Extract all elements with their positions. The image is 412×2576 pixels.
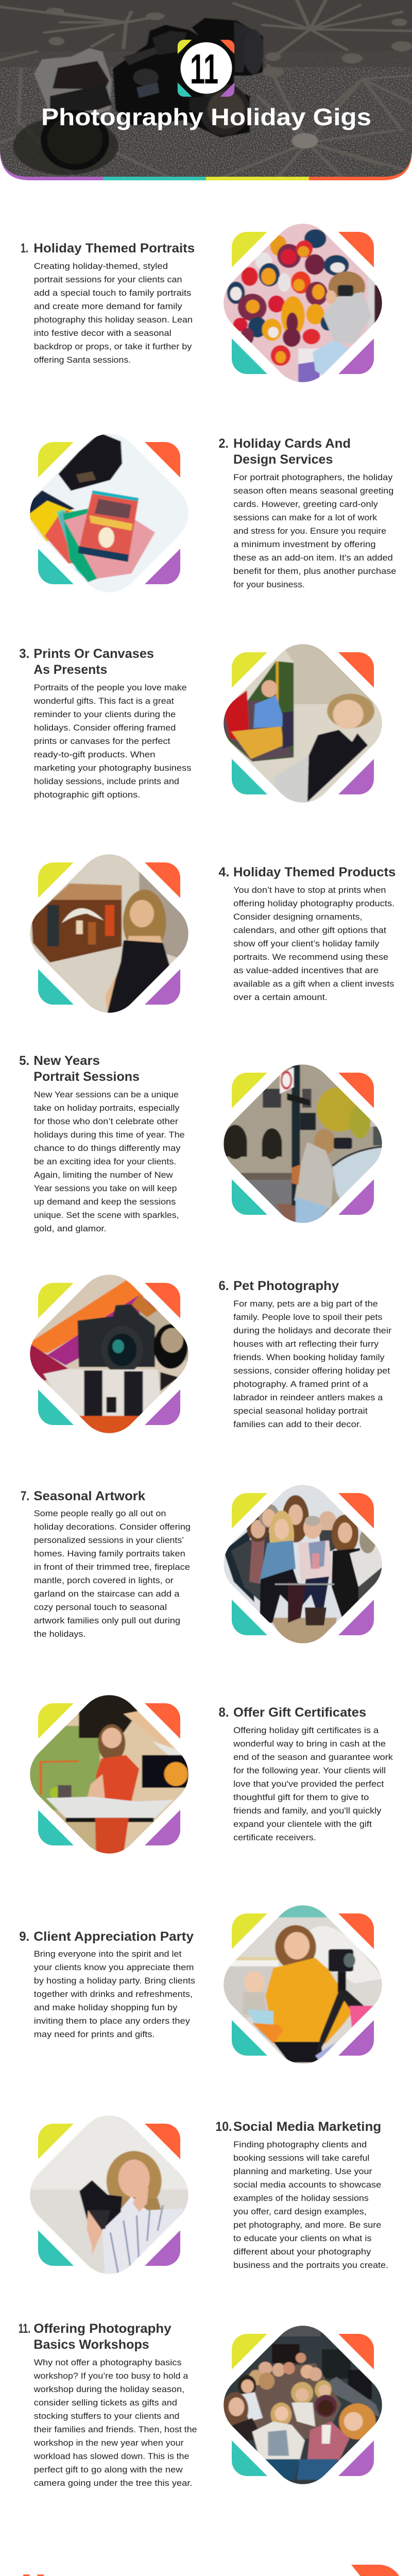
heading 5: New Years [33, 1054, 100, 1068]
body 8: thoughtful gift for them to give to [233, 1792, 369, 1802]
body 1 [34, 261, 193, 365]
section 2: Holiday Cards And Design Services [24, 429, 396, 601]
section 5 text [19, 1054, 185, 1233]
body 3: holiday sessions, include prints and [34, 776, 179, 786]
body 7: holiday decorations. Consider offering [34, 1522, 191, 1532]
body 4: available as a gift when a client invests [233, 979, 394, 989]
image 10: thoughtful woman holding a camera [30, 2115, 188, 2274]
heading 6: Pet Photography [233, 1279, 339, 1293]
body 2: these as an add-on item. It's an added [233, 553, 393, 563]
white circle [180, 42, 232, 94]
body 8: end of the season and guarantee work [233, 1752, 393, 1762]
heading 2 [218, 436, 351, 467]
body 10: social media accounts to showcase [233, 2180, 381, 2190]
body 10: Finding photography clients and [233, 2140, 367, 2149]
body 7: in front of their trimmed tree, fireplace [34, 1562, 190, 1572]
heading 3: As Presents [33, 663, 107, 677]
body 9: your clients know you appreciate them [34, 1962, 194, 1972]
body 5 [34, 1090, 185, 1233]
image 2: camera and printed cards [30, 434, 188, 592]
body 4: show off your client’s holiday family [233, 939, 380, 948]
section 10 text [215, 2120, 388, 2270]
heading 3: Prints Or Canvases [33, 647, 154, 661]
body 8: wonderful way to bring in cash at the [233, 1739, 386, 1749]
body 4: offering holiday photography products. [233, 899, 394, 908]
body 3 [33, 683, 191, 800]
body 11: workshop? If you’re too busy to hold a [33, 2371, 188, 2381]
body 1: photography this holiday season. Lean [34, 315, 193, 325]
body 11: consider selling tickets as gifts and [34, 2398, 177, 2408]
section 1: Holiday Themed Portraits [21, 224, 382, 382]
body 3: marketing your photography business [34, 763, 191, 773]
body 2: a minimum investment by offering [233, 539, 376, 549]
section 10: Social Media Marketing [24, 2112, 388, 2281]
badge with number 11 [178, 40, 234, 97]
body 2: For portrait photographers, the holiday [233, 472, 393, 482]
body 4: over a certain amount. [233, 992, 328, 1002]
body 3: Portraits of the people you love make [34, 683, 187, 692]
body 9: Bring everyone into the spirit and let [34, 1949, 182, 1959]
body 11 [33, 2358, 197, 2488]
body 2: sessions can make for a lot of work [233, 513, 377, 522]
heading 1: 1. [21, 241, 28, 256]
body 10: to educate your clients on what is [233, 2233, 372, 2243]
number 11: 11 [190, 46, 218, 93]
heading 3: 3. [19, 647, 29, 661]
body 1: and create more demand for family [34, 301, 182, 311]
body 6 [233, 1299, 392, 1429]
section 4: Holiday Themed Products [30, 854, 396, 1013]
orange corner accent [351, 2565, 403, 2576]
body 8 [233, 1725, 393, 1842]
heading 3 [19, 647, 154, 677]
body 3: holidays. Consider offering framed [34, 723, 176, 733]
body 6: during the holidays and decorate their [233, 1326, 392, 1335]
body 4: portraits. We recommend using these [233, 952, 388, 962]
heading 2: Design Services [233, 452, 333, 467]
body 10: booking sessions will take careful [233, 2153, 369, 2163]
body 8: certificate receivers. [233, 1833, 316, 1842]
image 8: woman in red dress at a desk [30, 1695, 188, 1854]
body 9: inviting them to place any orders they [34, 2016, 190, 2026]
section 8: Offer Gift Certificates [24, 1691, 393, 1860]
heading 9: Client Appreciation Party [33, 1929, 194, 1944]
heading 8: Offer Gift Certificates [233, 1705, 366, 1720]
body 7: cozy personal touch to seasonal [34, 1602, 167, 1612]
body 11: stocking stuffers to your clients and [34, 2411, 180, 2421]
body 5: up demand and keep the sessions [34, 1197, 176, 1207]
body 9: together with drinks and refreshments, [34, 1989, 193, 1999]
heading 4: 4. [218, 865, 230, 879]
body 3: prints or canvases for the perfect [34, 736, 170, 746]
section 2 text [218, 436, 396, 589]
body 8: expand your clientele with the gift [233, 1819, 372, 1829]
body 7: homes. Having family portraits taken [34, 1549, 185, 1558]
body 4: as value-added incentives that are [233, 965, 379, 975]
body 10: planning and marketing. Use your [233, 2166, 372, 2176]
body 1: add a special touch to family portraits [34, 288, 191, 298]
body 5: Year sessions you take on will keep [34, 1183, 177, 1193]
body 3: photographic gift options. [34, 790, 140, 800]
body 2: season often means seasonal greeting [233, 486, 393, 496]
section 1 text [21, 241, 195, 365]
body 5: Again, limiting the number of New [34, 1170, 173, 1180]
body 11: camera going under the tree this year. [34, 2478, 193, 2488]
heading 6: 6. [218, 1279, 229, 1293]
body 6: friends. When booking holiday family [233, 1352, 385, 1362]
heading 7: 7. [21, 1489, 29, 1503]
body 7: the holidays. [34, 1629, 85, 1639]
body 3: ready-to-gift products. When [34, 750, 156, 759]
section 6 text [218, 1279, 392, 1429]
section 5: New Years Portrait Sessions [19, 1054, 394, 1233]
body 6: houses with art reflecting their furry [233, 1339, 379, 1349]
body 5: gold, and glamor. [34, 1224, 107, 1233]
body 6: family. People love to spoil their pets [233, 1312, 382, 1322]
image 1: mural and photographer [224, 224, 382, 382]
section 9: Client Appreciation Party [19, 1903, 389, 2071]
heading 5 [19, 1054, 140, 1084]
section 7: Seasonal Artwork [21, 1484, 383, 1645]
Photography Business Institute logo [23, 2574, 123, 2576]
body 4 [233, 885, 394, 1002]
body 11: workshop in the new year when your [33, 2438, 184, 2448]
image 6: Canon camera and lenses on a striped rug [30, 1275, 188, 1433]
body 1: into festive decor with a seasonal [34, 328, 171, 338]
section 8 text [218, 1705, 393, 1842]
section 7 text [21, 1489, 191, 1639]
logo mark [23, 2574, 44, 2576]
section 9 text [19, 1929, 195, 2039]
body 2: for your business. [233, 580, 305, 589]
body 2: benefit for them, plus another purchase [233, 566, 396, 576]
body 6: For many, pets are a big part of the [233, 1299, 378, 1309]
body 6: sessions, consider offering holiday pet [233, 1366, 390, 1376]
heading 2: 2. [218, 436, 229, 451]
image 11: workshop group on a bus [224, 2326, 382, 2484]
body 10: pet photography, and more. Be sure [233, 2220, 381, 2230]
body 5: be an exciting idea for your clients. [34, 1157, 176, 1166]
body 6: photography. A framed print of a [233, 1379, 368, 1389]
image 5: photographer on a city street [224, 1064, 382, 1223]
body 3: reminder to your clients during the [34, 709, 176, 719]
section 3: Prints Or Canvases As Presents [19, 640, 389, 812]
body 5: New Year sessions can be a unique [34, 1090, 179, 1099]
body 1: backdrop or props, or take it further by [34, 342, 192, 351]
body 8: Offering holiday gift certificates is a [233, 1725, 379, 1735]
body 1: portrait sessions for your clients can [34, 275, 182, 284]
body 2 [233, 472, 396, 589]
section 3 text [19, 647, 191, 800]
body 10 [233, 2140, 388, 2270]
section 4 text [218, 865, 396, 1002]
left tele lens [34, 48, 112, 117]
heading 5: 5. [19, 1054, 29, 1068]
section 6: Pet Photography [24, 1271, 392, 1436]
body 7: artwork families only pull out during [34, 1616, 180, 1625]
body 9: may need for prints and gifts. [34, 2029, 154, 2039]
body 11: Why not offer a photography basics [34, 2358, 182, 2367]
heading 10: Social Media Marketing [233, 2120, 381, 2134]
body 5: chance to do things differently may [34, 1143, 181, 1153]
body 6: special seasonal holiday portrait [233, 1406, 368, 1416]
body 9 [34, 1949, 195, 2039]
body 7: Some people really go all out on [34, 1509, 166, 1518]
body 6: labrador in reindeer antlers makes a [233, 1393, 383, 1402]
body 5: unique. Set the scene with sparkles, [34, 1210, 179, 1220]
image 9: woman in yellow with camera on tripod [224, 1905, 382, 2064]
body 10: different about your photography [233, 2247, 371, 2257]
body 4: calendars, and other gift options that [233, 925, 386, 935]
body 11: perfect gift to go along with the new [34, 2465, 183, 2475]
image 7: team group portrait [224, 1484, 383, 1645]
heading 11: Offering Photography [33, 2321, 171, 2336]
body 6: families can add to their decor. [233, 1419, 362, 1429]
body 9: and make holiday shopping fun by [34, 2003, 178, 2012]
heading 2: Holiday Cards And [233, 436, 351, 451]
image 3: woman beside a print of a child [224, 644, 382, 803]
section 11 text [19, 2321, 197, 2488]
body 1: offering Santa sessions. [34, 355, 131, 365]
body 2: and stress for you. Ensure you require [233, 526, 386, 536]
body 7: mantle, porch covered in lights, or [34, 1575, 174, 1585]
body 1: Creating holiday-themed, styled [34, 261, 168, 271]
title: Photography Holiday Gigs [41, 104, 371, 130]
image 4: woman beside a canvas print [30, 854, 188, 1013]
body 7 [34, 1509, 191, 1639]
body 9: by hosting a holiday party. Bring clients [34, 1976, 195, 1986]
body 10: business and the portraits you create. [233, 2260, 388, 2270]
heading 1: Holiday Themed Portraits [33, 241, 195, 256]
body 11: their families and friends. Then, host the [34, 2425, 197, 2434]
heading 9: 9. [19, 1929, 29, 1944]
body 8: for the following year. Your clients will [233, 1766, 386, 1775]
heading 11: Basics Workshops [33, 2337, 149, 2352]
body 5: take on holiday portraits, especially [34, 1103, 180, 1113]
body 3: wonderful gifts. This fact is a great [33, 696, 174, 706]
body 10: examples of the holiday sessions [233, 2193, 369, 2203]
body 5: holidays during this time of year. The [34, 1130, 185, 1140]
right lens [192, 18, 263, 76]
body 2: cards. However, greeting card-only [233, 499, 378, 509]
body 8: love that you've provided the perfect [233, 1779, 384, 1789]
body 4: You don’t have to stop at prints when [233, 885, 386, 895]
body 7: personalized sessions in your clients’ [34, 1535, 184, 1545]
camera body [113, 25, 250, 138]
header photo: cameras on carpet [0, 0, 412, 180]
heading 7: Seasonal Artwork [33, 1489, 145, 1503]
heading 10: 10. [215, 2120, 232, 2134]
heading 8: 8. [218, 1705, 229, 1720]
body 11: workload has slowed down. This is the [33, 2451, 189, 2461]
body 11: workshop during the holiday season, [33, 2384, 184, 2394]
heading 4: Holiday Themed Products [233, 865, 396, 879]
header banner [0, 0, 412, 180]
heading 5: Portrait Sessions [33, 1070, 140, 1084]
body 5: for those who don’t celebrate other [34, 1116, 178, 1126]
section 11: Offering Photography Basics Workshops [19, 2321, 389, 2495]
footer [23, 2565, 403, 2576]
body 4: Consider designing ornaments, [233, 912, 363, 922]
body 8: friends and family, and you'll quickly [233, 1806, 382, 1816]
header colour band [0, 148, 412, 180]
heading 11 [19, 2321, 171, 2352]
body 10: you offer, card design examples, [233, 2207, 367, 2216]
body 7: garland on the staircase can add a [34, 1589, 180, 1599]
heading 11: 11. [19, 2321, 30, 2336]
